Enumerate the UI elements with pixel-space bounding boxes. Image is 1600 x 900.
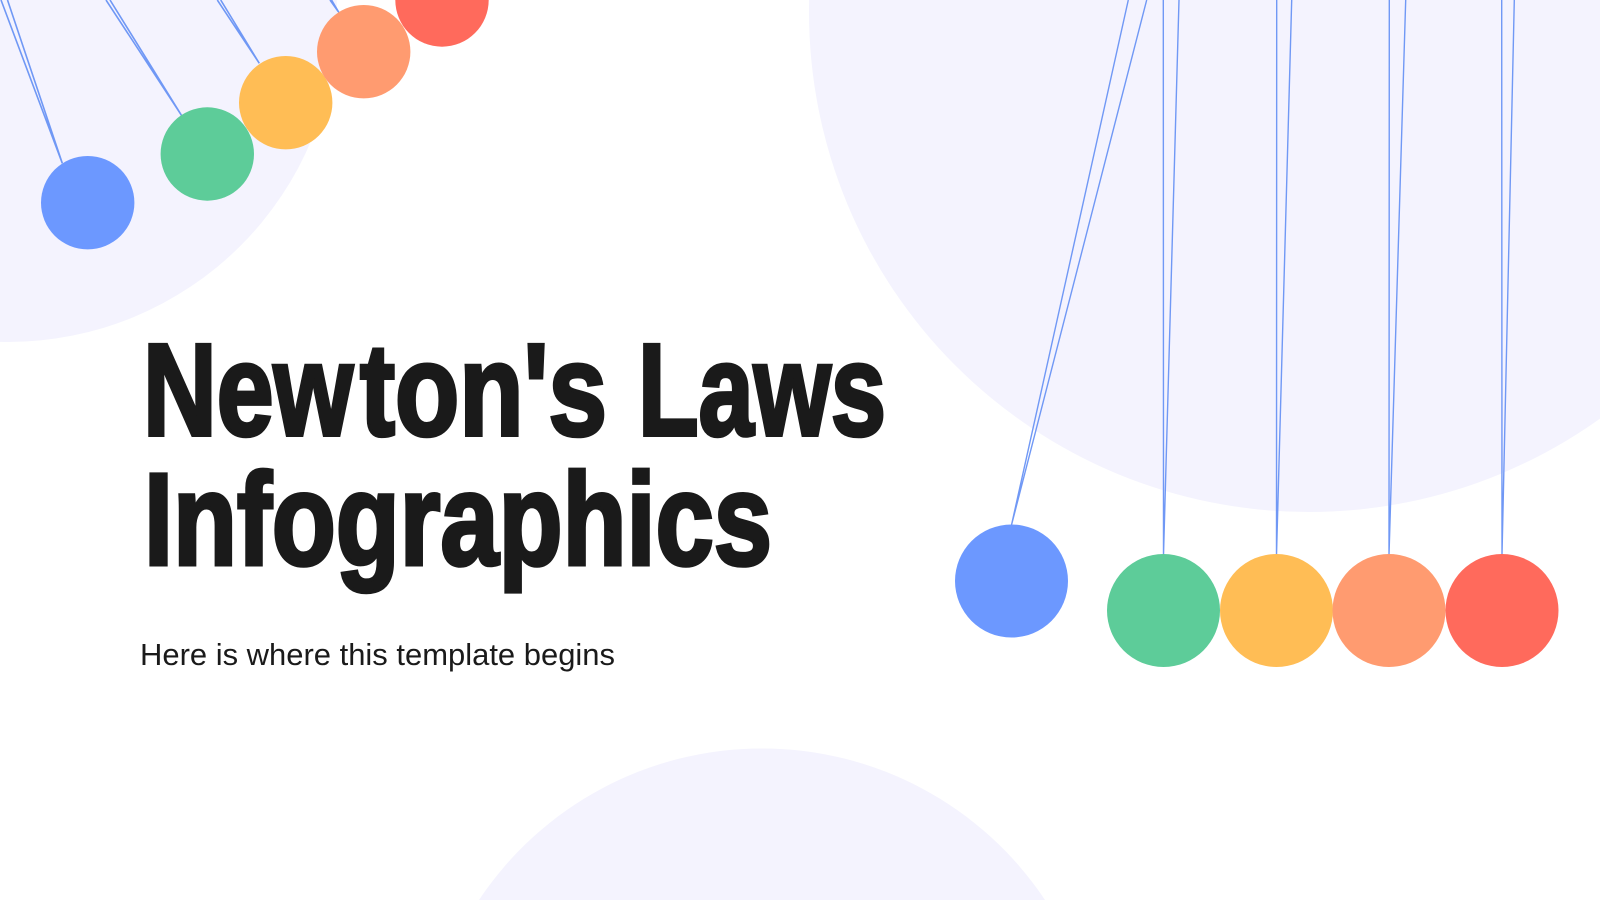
- title: Laws: [638, 316, 886, 463]
- pendulum cradle: top left: [1, 0, 489, 249]
- red ball: [395, 0, 489, 47]
- background circle: top left: [0, 0, 337, 342]
- background circle: top right: [809, 0, 1600, 512]
- pendulum cradle: right: [955, 0, 1558, 667]
- title: [143, 316, 886, 592]
- background circle: bottom centre: [479, 748, 1045, 900]
- green ball with strings: [1107, 0, 1220, 667]
- blue ball with strings: [955, 0, 1147, 638]
- yellow ball with strings: [1220, 0, 1333, 667]
- orange ball with strings: [317, 0, 410, 98]
- yellow ball with strings: [217, 0, 332, 149]
- subtitle: Here is where this template begins: [140, 637, 615, 672]
- red ball with strings: [1446, 0, 1558, 667]
- title: Infographics: [144, 446, 772, 592]
- blue ball with strings: [1, 0, 134, 249]
- title: ton's: [360, 316, 607, 463]
- title: New: [143, 316, 354, 463]
- orange ball with strings: [1332, 0, 1446, 667]
- green ball with strings: [106, 0, 254, 201]
